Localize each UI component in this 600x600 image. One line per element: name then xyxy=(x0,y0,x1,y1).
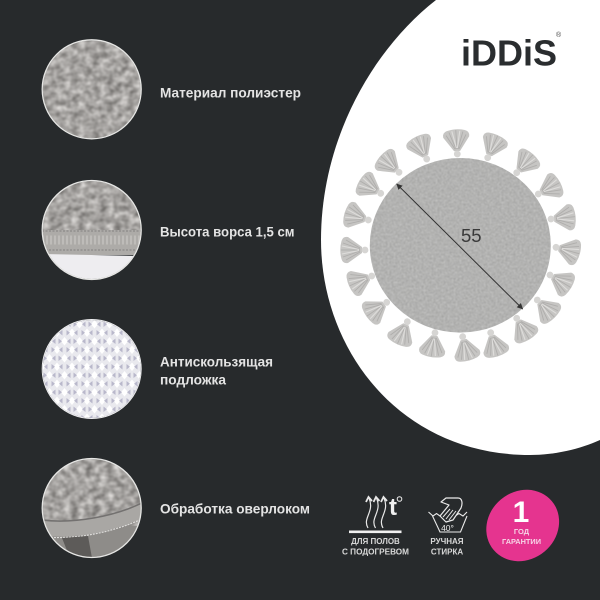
label xyxy=(160,355,273,388)
temperature mark: t xyxy=(389,494,397,521)
caption xyxy=(342,537,409,556)
label: подложка xyxy=(160,372,226,388)
caption: ГОД xyxy=(514,527,530,536)
label: Обработка оверлоком xyxy=(160,502,310,516)
feature 2: pile height xyxy=(42,180,295,282)
photo: backing pattern xyxy=(42,319,142,419)
caption: СТИРКА xyxy=(431,548,463,556)
label: Высота ворса 1,5 см xyxy=(160,224,295,240)
hand xyxy=(440,498,462,522)
logo: IDDIS: iDDiS xyxy=(461,32,557,74)
dimension value: 55 xyxy=(461,225,482,246)
feature 1: material xyxy=(42,40,301,140)
pink blob xyxy=(472,475,574,576)
caption xyxy=(502,527,541,546)
white blob panel xyxy=(321,0,600,455)
label: Антискользящая xyxy=(160,355,273,370)
tassels ring xyxy=(340,128,583,364)
feature 4: overlock xyxy=(42,458,310,558)
caption: ДЛЯ ПОЛОВ xyxy=(351,537,400,546)
heat arrows xyxy=(366,497,387,528)
floor bar xyxy=(349,530,402,533)
caption xyxy=(430,537,464,556)
wash tub xyxy=(428,512,467,532)
hand shading xyxy=(443,509,456,520)
rug body xyxy=(365,153,555,338)
caption: РУЧНАЯ xyxy=(430,537,464,546)
label: Материал полиэстер xyxy=(160,86,301,100)
feature 3: anti-slip backing xyxy=(42,319,273,419)
logo: IDDIS: ® xyxy=(556,31,562,39)
caption: С ПОДОГРЕВОМ xyxy=(342,548,409,556)
dimension arrow xyxy=(397,184,523,309)
badge: 1 year warranty xyxy=(472,475,574,576)
photo: pile edge xyxy=(42,180,142,282)
icon: heated floors xyxy=(342,494,409,556)
number: 1 xyxy=(513,496,529,529)
product photo: round rug with tassels xyxy=(340,128,583,364)
icon: hand wash xyxy=(428,498,467,556)
caption: ГАРАНТИИ xyxy=(502,537,541,546)
temperature: 40° xyxy=(441,523,454,533)
photo: overlocked edge xyxy=(42,458,142,558)
photo: pile texture xyxy=(42,40,142,140)
